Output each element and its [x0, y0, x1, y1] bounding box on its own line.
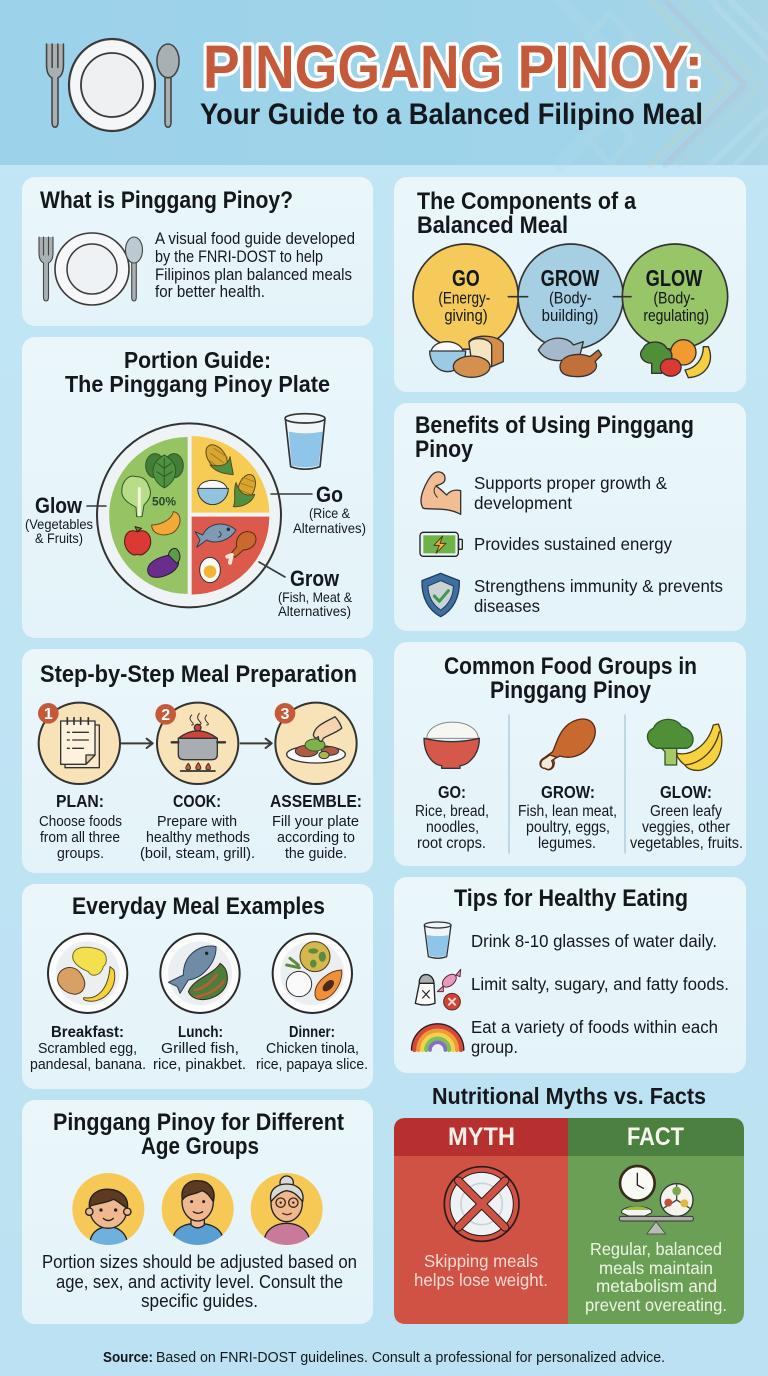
icon: elder — [251, 1173, 323, 1250]
panel: different age groups — [22, 1100, 373, 1324]
text: glow: GLOW — [646, 265, 703, 291]
heading: benefits: Benefits of Using Pinggang — [415, 412, 694, 439]
title: PINGGANG PINOY: — [203, 33, 703, 101]
icon: chicken leg — [227, 532, 256, 563]
heading: common food groups: Common Food Groups in — [444, 653, 697, 680]
text: grow foods: poultry, eggs, — [526, 819, 610, 836]
icon: cook pot — [157, 703, 238, 784]
text: glow foods: vegetables, fruits. — [630, 835, 743, 852]
icon: lunch plate — [160, 934, 240, 1013]
text: go — [438, 265, 490, 325]
heading: components: Balanced Meal — [417, 212, 568, 239]
text: plan: Choose foods — [39, 813, 122, 830]
text: grow foods: legumes. — [538, 835, 596, 852]
icon: glow foods — [641, 340, 710, 378]
text: go foods: root crops. — [417, 835, 486, 852]
icon: spinach — [146, 454, 183, 488]
text: 50 percent: 50% — [152, 495, 176, 509]
icon: corn one — [202, 441, 233, 475]
text: cook: (boil, steam, grill). — [140, 845, 255, 862]
text: assemble: according to — [277, 829, 355, 846]
icon: crossed plate — [444, 1167, 519, 1241]
text: dinner: Chicken tinola, — [266, 1040, 359, 1057]
label: go: Go — [316, 482, 343, 507]
heading: portion guide: Portion Guide: — [124, 347, 271, 373]
header banner — [0, 0, 768, 165]
icon: eggplant — [148, 548, 180, 577]
heading: portion guide — [65, 347, 330, 397]
text: description: A visual food guide developed — [155, 230, 355, 248]
heading: meal examples: Everyday Meal Examples — [72, 893, 325, 920]
text: age groups note: age, sex, and activity level. Consult the — [56, 1272, 343, 1292]
text: immunity benefit: diseases — [474, 596, 540, 616]
text: breakfast: Breakfast: — [51, 1024, 124, 1041]
text: grow foods: GROW: — [541, 782, 595, 802]
text: myth statement: Skipping meals — [424, 1251, 538, 1271]
icon: chicken drumstick — [540, 719, 595, 770]
panel: tips for healthy eating — [394, 877, 746, 1073]
text: variety tip: group. — [471, 1037, 518, 1057]
text: myth label: MYTH — [448, 1123, 515, 1151]
panel: common food groups — [394, 642, 746, 866]
icon: child — [72, 1173, 144, 1250]
text: go foods: Rice, bread, — [415, 803, 489, 820]
text: lunch: Lunch: — [178, 1024, 223, 1041]
text: glow — [643, 265, 709, 325]
text: assemble: ASSEMBLE: — [270, 791, 362, 811]
source footer: Source: — [103, 1349, 153, 1366]
text: breakfast: pandesal, banana. — [30, 1056, 146, 1073]
text: breakfast: Scrambled egg, — [38, 1040, 137, 1057]
icon: fish — [195, 524, 236, 547]
panel: benefits — [394, 403, 746, 631]
text: cook: COOK: — [173, 791, 221, 811]
text: glow: (Body- — [653, 288, 695, 307]
text: go: (Energy- — [438, 288, 490, 307]
text: myth statement: helps lose weight. — [414, 1270, 548, 1290]
text: assemble: Fill your plate — [272, 813, 359, 830]
badge: step 1: 1 — [44, 706, 53, 723]
text: description: for better health. — [155, 283, 265, 301]
text: description — [155, 230, 355, 301]
icon: adult — [162, 1173, 234, 1250]
text: glow foods — [630, 782, 743, 852]
text: growth benefit: Supports proper growth & — [474, 473, 667, 493]
text: plan — [39, 791, 122, 862]
text: cook: Prepare with — [157, 813, 237, 830]
text: go: GO — [452, 265, 480, 291]
circles and food icons — [413, 244, 728, 378]
icon: shield — [422, 573, 459, 617]
heading: components: The Components of a — [417, 188, 636, 215]
icon: assemble plate — [275, 703, 357, 784]
icon: boiled egg — [200, 557, 220, 583]
text: breakfast — [30, 1024, 146, 1073]
heading: age groups: Age Groups — [141, 1133, 259, 1160]
badge: step 1 — [38, 703, 59, 724]
text: age groups note: Portion sizes should be adjusted based on — [42, 1252, 357, 1272]
text: assemble — [270, 791, 362, 862]
heading: benefits — [415, 412, 694, 463]
text: fact statement: meals maintain — [599, 1258, 713, 1278]
badge: step 3 — [275, 703, 295, 724]
label: go: Alternatives) — [293, 520, 366, 536]
heading: age groups — [53, 1109, 344, 1160]
icon: water glass — [285, 414, 325, 469]
icon: plan notepad — [39, 703, 120, 784]
text: plan: groups. — [57, 845, 104, 862]
icon: grow foods — [538, 338, 602, 377]
icon: glass of water — [424, 922, 451, 958]
text: grow — [541, 265, 600, 325]
text: go: giving) — [444, 306, 488, 325]
text: fact label: FACT — [627, 1123, 684, 1151]
label: glow: Glow — [35, 493, 82, 518]
label: go: (Rice & — [309, 505, 351, 521]
heading: portion guide: The Pinggang Pinoy Plate — [65, 371, 330, 397]
text: variety tip: Eat a variety of foods within each — [471, 1017, 718, 1037]
text: immunity benefit — [474, 576, 723, 616]
text: grow: (Body- — [549, 288, 592, 307]
icon: plate with fork and spoon — [39, 233, 142, 305]
panel: fact column — [568, 1118, 744, 1324]
icon: rice bowl — [424, 722, 479, 768]
text: variety tip — [471, 1017, 718, 1057]
text: myth statement — [414, 1251, 548, 1290]
text: grow: GROW — [541, 265, 600, 291]
heading: myths vs facts: Nutritional Myths vs. Facts — [432, 1083, 706, 1109]
icon: clock, plate and balance — [619, 1166, 693, 1234]
panel: myth column — [394, 1118, 568, 1324]
text: plan: PLAN: — [56, 791, 104, 811]
text: cook — [140, 791, 255, 862]
label: glow: (Vegetables — [25, 516, 93, 532]
icon: corn two — [233, 472, 259, 507]
text: fact statement: metabolism and — [596, 1276, 717, 1296]
text: glow foods: Green leafy — [650, 803, 722, 820]
panel: meal preparation steps — [22, 649, 373, 873]
label: glow — [25, 493, 106, 546]
text: fact statement: prevent overeating. — [585, 1295, 727, 1315]
text: plan: from all three — [40, 829, 120, 846]
text: limit tip: Limit salty, sugary, and fatty foods. — [471, 974, 729, 994]
panel: portion guide — [22, 337, 373, 638]
icon: go foods — [430, 336, 503, 377]
text: age groups note: specific guides. — [141, 1291, 258, 1311]
badge: step 3: 3 — [281, 706, 290, 723]
text: immunity benefit: Strengthens immunity & prevents — [474, 576, 723, 596]
heading: age groups: Pinggang Pinoy for Different — [53, 1109, 344, 1136]
icon: mango — [152, 512, 180, 535]
label: grow: (Fish, Meat & — [278, 589, 353, 605]
text: cook: healthy methods — [146, 829, 250, 846]
heading: what is: What is Pinggang Pinoy? — [40, 187, 293, 214]
heading: common food groups: Pinggang Pinoy — [490, 677, 651, 704]
badge: step 2: 2 — [161, 707, 170, 724]
icon: lettuce — [122, 476, 150, 517]
text: fact statement — [585, 1239, 727, 1315]
arrows — [122, 739, 272, 748]
text: fact statement: Regular, balanced — [590, 1239, 722, 1259]
panel: what is pinggang pinoy — [22, 177, 373, 326]
label: go — [271, 482, 366, 536]
text: lunch: Grilled fish, — [161, 1040, 239, 1057]
text: age groups note — [42, 1252, 357, 1311]
text: go foods — [415, 782, 489, 852]
icon: rainbow — [412, 1024, 464, 1050]
icon: broccoli and banana — [647, 719, 722, 770]
icon: rice bowl — [198, 480, 228, 505]
label: grow: Grow — [290, 566, 339, 591]
chart: portion plate — [97, 423, 281, 607]
text: glow foods: veggies, other — [642, 819, 730, 836]
heading: tips: Tips for Healthy Eating — [454, 885, 688, 912]
icon: battery — [420, 532, 462, 556]
icon: breakfast plate — [48, 934, 127, 1013]
text: go foods: GO: — [438, 782, 466, 802]
panel: components of a balanced meal — [394, 177, 746, 392]
heading: common food groups — [444, 653, 697, 704]
title: Your Guide to a Balanced Filipino Meal — [200, 98, 703, 131]
text: dinner — [256, 1024, 368, 1073]
text: dinner: Dinner: — [289, 1024, 335, 1041]
icon: apple — [125, 527, 151, 555]
text: lunch: rice, pinakbet. — [153, 1056, 246, 1073]
panel: everyday meal examples — [22, 884, 373, 1089]
text: growth benefit: development — [474, 493, 572, 513]
icon: header plate and cutlery — [47, 39, 179, 131]
text: description: by the FNRI-DOST to help — [155, 248, 323, 266]
text: glow foods: GLOW: — [660, 782, 712, 802]
icon: salt shaker and candy — [415, 969, 461, 1010]
label: grow — [259, 562, 353, 619]
text: grow foods: Fish, lean meat, — [518, 803, 617, 820]
text: assemble: the guide. — [285, 845, 347, 862]
label: glow: & Fruits) — [35, 530, 83, 546]
text: go foods: noodles, — [426, 819, 479, 836]
label: grow: Alternatives) — [278, 603, 351, 619]
heading: benefits: Pinoy — [415, 436, 473, 463]
icon: flexed arm — [421, 472, 461, 514]
text: energy benefit: Provides sustained energy — [474, 534, 672, 554]
text: dinner: rice, papaya slice. — [256, 1056, 368, 1073]
step icons and arrows — [38, 703, 357, 784]
badge: step 2 — [155, 704, 176, 725]
title — [200, 33, 703, 131]
text: lunch — [153, 1024, 246, 1073]
text: grow foods — [518, 782, 617, 852]
heading: components — [417, 188, 636, 239]
text: growth benefit — [474, 473, 667, 513]
text: description: Filipinos plan balanced meals — [155, 266, 352, 284]
source footer: Based on FNRI-DOST guidelines. Consult a professional for personalized advice. — [156, 1349, 665, 1366]
text: water tip: Drink 8-10 glasses of water daily. — [471, 931, 717, 951]
icon: dinner plate — [273, 934, 352, 1013]
heading: steps: Step-by-Step Meal Preparation — [40, 661, 357, 688]
text: grow: building) — [542, 306, 598, 325]
text: glow: regulating) — [643, 306, 709, 325]
